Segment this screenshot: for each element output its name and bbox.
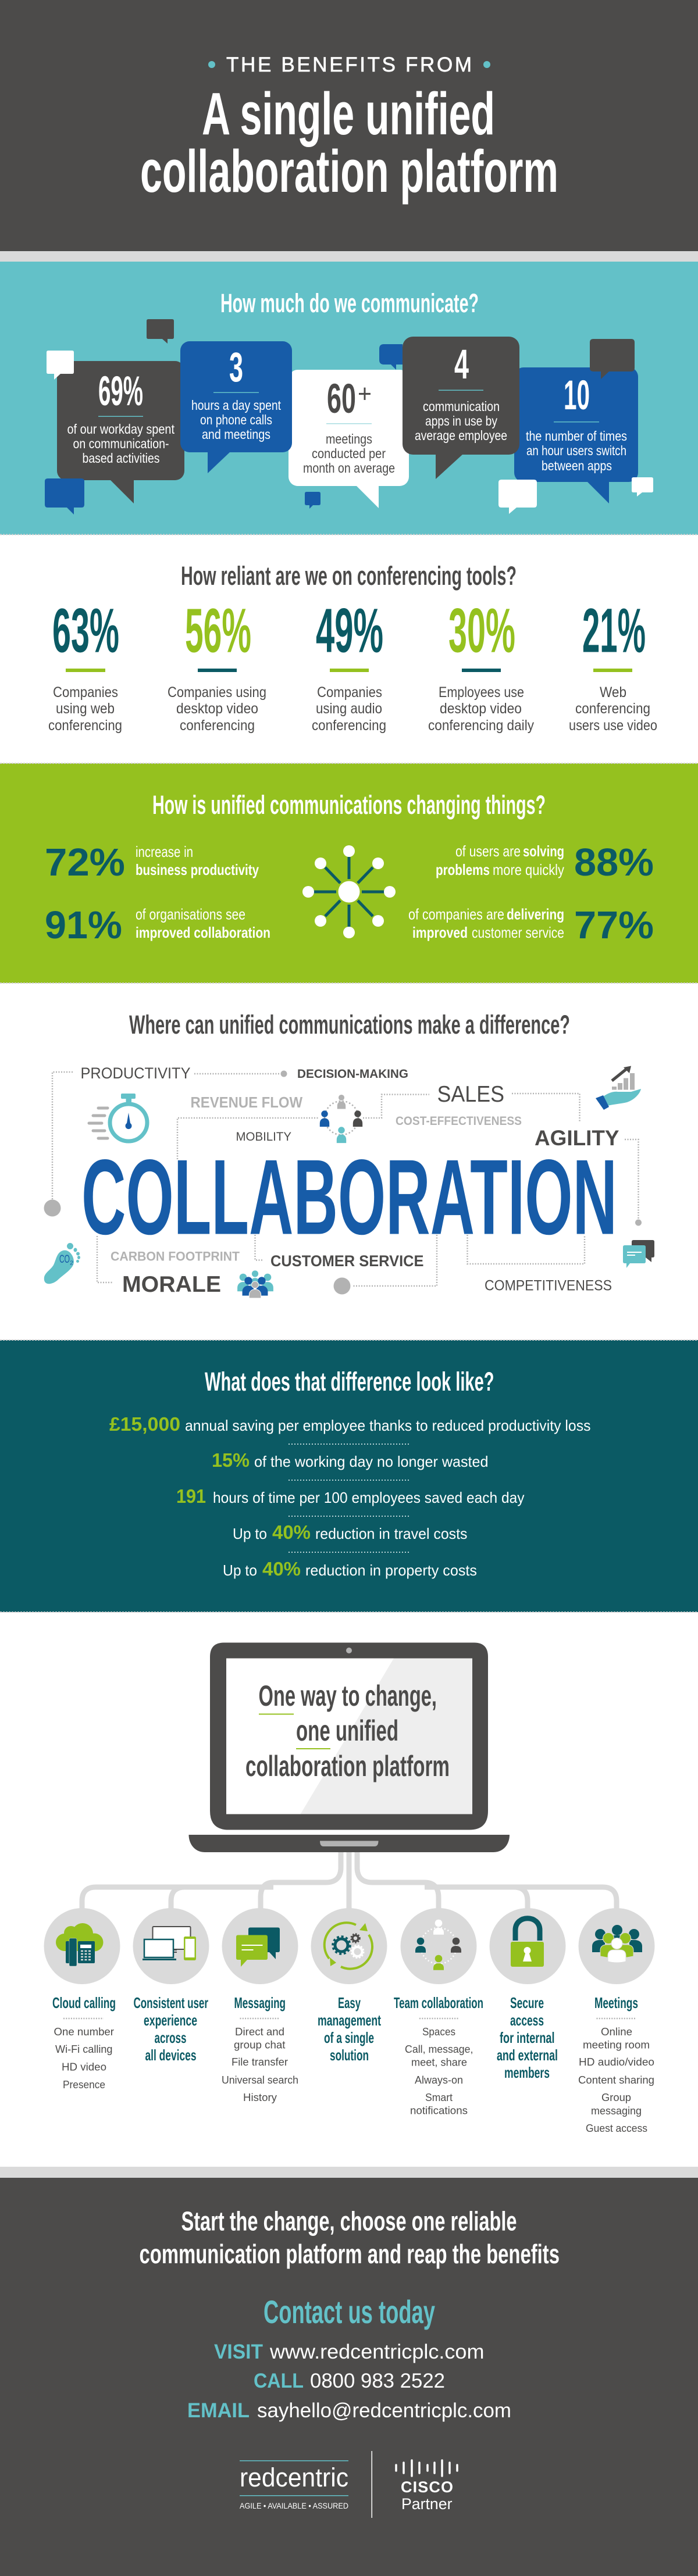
stat: 56%: conferencing bbox=[180, 717, 255, 734]
word: CUSTOMER SERVICE: CUSTOMER SERVICE bbox=[270, 1252, 423, 1270]
feature list bbox=[405, 2025, 473, 2116]
stat line: travel costs bbox=[233, 1521, 468, 1543]
feature list bbox=[54, 2025, 114, 2091]
panel: what does that difference look like bbox=[0, 1340, 698, 1612]
bubble: 10: between apps bbox=[542, 458, 612, 473]
stat line: property costs: 40% bbox=[262, 1558, 301, 1580]
eyebrow heading: THE BENEFITS FROM bbox=[226, 53, 472, 76]
stat: 63%: using web bbox=[56, 701, 115, 717]
stat: 56% bbox=[168, 595, 266, 734]
icon: chat bubbles bbox=[623, 1240, 654, 1268]
panel: where can unified communications make a difference bbox=[0, 983, 698, 1340]
stat: 21%: Web bbox=[600, 684, 626, 701]
stat: 72% bbox=[45, 841, 259, 884]
bubble: 10: 10 bbox=[564, 373, 590, 419]
stat: 72%: increase in bbox=[136, 843, 193, 860]
screen heading bbox=[245, 1680, 450, 1782]
feature: consistent user experience bbox=[133, 1908, 209, 2064]
feature title: management bbox=[318, 2012, 381, 2029]
word: CARBON FOOTPRINT: CARBON FOOTPRINT bbox=[111, 1249, 240, 1264]
bubble: small blue behind 4 bbox=[379, 344, 403, 370]
stat: 72%: business productivity bbox=[136, 861, 259, 878]
bubble: 60+ bbox=[289, 370, 409, 508]
stat: 30%: conferencing daily bbox=[428, 717, 534, 734]
feature list: Universal search bbox=[222, 2074, 298, 2086]
stat: 88%: of users are bbox=[455, 842, 521, 860]
feature list bbox=[222, 2025, 298, 2103]
stat line: travel costs: 40% bbox=[272, 1521, 311, 1543]
logo: cisco partner: Partner bbox=[401, 2495, 453, 2513]
panel: how much do we communicate bbox=[0, 262, 698, 535]
feature list: One number bbox=[54, 2025, 114, 2038]
feature list bbox=[578, 2025, 654, 2134]
icon: group of people bbox=[237, 1270, 273, 1298]
stat line: £15,000: annual saving per employee thanks to reduced productivity loss bbox=[185, 1417, 591, 1434]
stat: 88%: solving bbox=[523, 842, 564, 860]
bubble: 69%: 69% bbox=[98, 369, 143, 415]
feature title bbox=[134, 1994, 208, 2064]
panel: one way to change bbox=[44, 1643, 655, 2134]
feature list: meet, share bbox=[411, 2056, 467, 2068]
closing statement bbox=[140, 2206, 560, 2269]
icon: CO2 footprint: CO bbox=[59, 1253, 70, 1266]
bubble: 69%: based activities bbox=[83, 451, 159, 466]
contact: call: CALL bbox=[254, 2370, 304, 2392]
stat: 77%: 77% bbox=[574, 903, 654, 947]
stat line: £15,000: £15,000 bbox=[109, 1413, 180, 1435]
word: AGILITY: AGILITY bbox=[535, 1126, 619, 1150]
feature title: members bbox=[504, 2064, 550, 2081]
feature list: Wi-Fi calling bbox=[55, 2043, 113, 2055]
closing statement: Start the change, choose one reliable bbox=[181, 2206, 517, 2236]
stat: 49%: Companies bbox=[317, 684, 382, 701]
screen heading: collaboration platform bbox=[245, 1750, 450, 1782]
feature list: Online bbox=[601, 2025, 632, 2038]
stat: 21% bbox=[569, 595, 657, 734]
contact: visit: VISIT bbox=[214, 2341, 263, 2363]
stat: 49%: conferencing bbox=[312, 717, 386, 734]
dotted connector lines bbox=[44, 1071, 642, 1294]
title: A single unified bbox=[202, 80, 495, 147]
feature list: Presence bbox=[63, 2078, 105, 2091]
feature title: Meetings bbox=[594, 1994, 638, 2012]
icon: laptop bbox=[188, 1643, 510, 1852]
icon: CO2 footprint: 2 bbox=[70, 1260, 73, 1266]
panel: call to action footer bbox=[0, 2167, 698, 2576]
word: MOBILITY: MOBILITY bbox=[236, 1130, 291, 1144]
stat line: travel costs: Up to bbox=[233, 1525, 267, 1542]
icon: message bubbles bbox=[236, 1928, 280, 1967]
bubble: 10 bbox=[514, 367, 638, 503]
feature title bbox=[497, 1994, 558, 2081]
icon: hub network bbox=[302, 845, 396, 938]
heading: How reliant are we on conferencing tools? bbox=[181, 561, 517, 591]
heading: What does that difference look like? bbox=[205, 1367, 494, 1396]
stat: 49% bbox=[312, 595, 386, 734]
word: PRODUCTIVITY: PRODUCTIVITY bbox=[80, 1064, 191, 1082]
word: COST-EFFECTIVENESS: COST-EFFECTIVENESS bbox=[396, 1114, 522, 1128]
feature title: all devices bbox=[145, 2046, 197, 2064]
bubble: 60+: 60 bbox=[327, 376, 356, 422]
bubble: 3: 3 bbox=[229, 345, 243, 391]
word: REVENUE FLOW: REVENUE FLOW bbox=[191, 1095, 303, 1111]
screen heading: One way to change, bbox=[258, 1680, 437, 1712]
stat: 56%: desktop video bbox=[176, 701, 258, 717]
bubble: 69%: on communication- bbox=[73, 436, 169, 451]
feature list: Always-on bbox=[415, 2074, 463, 2086]
feature list: Spaces bbox=[422, 2025, 455, 2038]
feature list: notifications bbox=[410, 2105, 468, 2116]
stat: 49%: 49% bbox=[316, 595, 383, 665]
bubble: 69% bbox=[57, 361, 184, 503]
logo: cisco partner bbox=[396, 2460, 457, 2513]
stat line: 191 bbox=[176, 1485, 525, 1507]
feature list: Group bbox=[601, 2091, 631, 2103]
word: MORALE: MORALE bbox=[122, 1272, 221, 1297]
feature: team collaboration bbox=[394, 1908, 483, 2116]
icon: padlock bbox=[511, 1918, 544, 1967]
feature title: Secure bbox=[510, 1994, 544, 2012]
logo: redcentric: AGILE • AVAILABLE • ASSURED bbox=[240, 2501, 348, 2510]
icon: stopwatch bbox=[89, 1094, 147, 1141]
stat: 77%: improved bbox=[412, 924, 468, 941]
feature: meetings bbox=[578, 1908, 655, 2134]
feature list: messaging bbox=[591, 2105, 642, 2117]
panel: how reliant are we on conferencing tools bbox=[0, 535, 698, 763]
stat: 30% bbox=[428, 595, 534, 734]
stat line: travel costs: reduction in travel costs bbox=[315, 1525, 468, 1542]
bubble: 3: hours a day spent bbox=[191, 398, 282, 413]
stat: 63%: 63% bbox=[52, 595, 119, 665]
bubble: 69%: of our workday spent bbox=[67, 421, 175, 437]
screen heading: one unified bbox=[296, 1714, 398, 1747]
contact: visit: www.redcentricplc.com bbox=[269, 2341, 484, 2363]
word: SALES: SALES bbox=[437, 1082, 504, 1107]
contact: email: EMAIL bbox=[187, 2399, 250, 2422]
feature title bbox=[318, 1994, 381, 2064]
stat: 77%: delivering bbox=[507, 906, 564, 923]
feature list: Content sharing bbox=[578, 2074, 654, 2086]
bubble: 60+: meetings bbox=[326, 431, 372, 446]
feature: cloud calling bbox=[44, 1908, 120, 2091]
feature title: for internal bbox=[500, 2029, 555, 2046]
feature title: Team collaboration bbox=[394, 1994, 483, 2012]
stat line: 15% bbox=[212, 1449, 489, 1471]
contact heading: Contact us today bbox=[263, 2293, 435, 2330]
icon: cloud phone bbox=[56, 1923, 104, 1966]
stat: 88% bbox=[436, 841, 654, 884]
bubble: 60+: month on average bbox=[303, 460, 395, 476]
stat: 77%: customer service bbox=[472, 924, 564, 941]
bubble: 3: and meetings bbox=[202, 427, 270, 442]
stat: 56%: Companies using bbox=[168, 684, 266, 701]
bubble: 3: on phone calls bbox=[200, 412, 272, 427]
stat: 91%: of organisations see bbox=[136, 906, 245, 923]
stat: 21%: conferencing bbox=[575, 701, 650, 717]
bubble: 4: 4 bbox=[454, 342, 469, 388]
title bbox=[140, 80, 558, 205]
icon: gears and loop bbox=[325, 1923, 372, 1969]
logo: redcentric: redcentric bbox=[240, 2463, 348, 2492]
feature title: Easy bbox=[338, 1994, 361, 2012]
feature: messaging bbox=[222, 1908, 298, 2103]
stat: 91% bbox=[45, 903, 270, 947]
stat: 91%: 91% bbox=[45, 903, 122, 947]
word: COMPETITIVENESS: COMPETITIVENESS bbox=[485, 1278, 612, 1294]
feature: easy management bbox=[311, 1908, 387, 2064]
stat: 88%: more quickly bbox=[493, 861, 564, 878]
panel: how is unified communications changing things bbox=[0, 763, 698, 983]
panel: header bbox=[0, 0, 698, 262]
stat line: 15%: of the working day no longer wasted bbox=[254, 1453, 489, 1470]
feature list: group chat bbox=[234, 2038, 285, 2051]
stat: 21%: users use video bbox=[569, 717, 657, 734]
feature title: Cloud calling bbox=[52, 1994, 116, 2012]
small speech bubbles bbox=[45, 319, 653, 515]
stat: 91%: improved collaboration bbox=[136, 924, 270, 941]
icon: left title dot bbox=[208, 61, 215, 68]
word: DECISION-MAKING: DECISION-MAKING bbox=[297, 1067, 408, 1081]
feature list: meeting room bbox=[583, 2038, 650, 2051]
feature title: access bbox=[510, 2012, 544, 2029]
connector tubes bbox=[82, 1852, 617, 1913]
bubble: 10: the number of times bbox=[526, 428, 627, 444]
contact: email: sayhello@redcentricplc.com bbox=[257, 2399, 511, 2422]
stat: 30%: Employees use bbox=[439, 684, 524, 701]
stat: 63%: conferencing bbox=[48, 717, 122, 734]
bubble: 60+: conducted per bbox=[312, 446, 386, 461]
feature list: History bbox=[243, 2091, 277, 2103]
stat: 88%: 88% bbox=[574, 841, 654, 884]
feature list: HD audio/video bbox=[579, 2056, 654, 2068]
feature list: Guest access bbox=[586, 2122, 647, 2134]
icon: CO2 footprint bbox=[44, 1243, 80, 1284]
feature list: File transfer bbox=[232, 2056, 288, 2068]
stat line: £15,000 bbox=[109, 1413, 591, 1435]
feature title: across bbox=[155, 2029, 186, 2046]
feature title: Consistent user bbox=[134, 1994, 208, 2012]
icon: devices bbox=[143, 1927, 196, 1960]
feature list: HD video bbox=[62, 2060, 106, 2073]
feature title: and external bbox=[497, 2046, 558, 2064]
feature title: of a single bbox=[324, 2029, 374, 2046]
stat: 56%: 56% bbox=[185, 595, 251, 665]
bubble: 3 bbox=[180, 341, 292, 473]
bubble: 4: average employee bbox=[415, 428, 507, 443]
bubble: 60+: + bbox=[358, 380, 372, 408]
stat line: property costs bbox=[223, 1558, 477, 1580]
feature title: Messaging bbox=[234, 1994, 286, 2012]
feature title: solution bbox=[330, 2046, 369, 2064]
stat line: property costs: Up to bbox=[223, 1562, 257, 1579]
stat: 77%: of companies are bbox=[408, 906, 504, 923]
icon: people ring bbox=[320, 1095, 362, 1143]
heading: How much do we communicate? bbox=[220, 288, 479, 318]
feature title: experience bbox=[144, 2012, 197, 2029]
bubble: 4 bbox=[403, 337, 519, 479]
stat: 63%: Companies bbox=[53, 684, 118, 701]
icon: hand with growth chart bbox=[596, 1066, 641, 1110]
logo: cisco partner: CISCO bbox=[401, 2478, 453, 2496]
stat line: 15%: 15% bbox=[212, 1449, 250, 1471]
stat: 63% bbox=[48, 595, 122, 734]
icon: meeting group bbox=[592, 1925, 642, 1963]
stat line: property costs: reduction in property costs bbox=[305, 1562, 477, 1579]
logo: redcentric bbox=[240, 2460, 348, 2510]
bubble: 4: apps in use by bbox=[425, 413, 497, 428]
stat: 88%: problems bbox=[436, 861, 490, 878]
stat line: 191: 191 bbox=[176, 1485, 206, 1507]
feature list: Direct and bbox=[235, 2025, 284, 2038]
feature list: Smart bbox=[425, 2091, 453, 2103]
stat: 77% bbox=[408, 903, 654, 947]
feature list: Call, message, bbox=[405, 2043, 473, 2055]
stat: 30%: desktop video bbox=[440, 701, 522, 717]
stat line: 191: hours of time per 100 employees saved each day bbox=[213, 1489, 525, 1506]
bubble: 10: an hour users switch bbox=[526, 443, 626, 458]
icon: team ring bbox=[415, 1920, 461, 1970]
icon: right title dot bbox=[483, 61, 490, 68]
contact: call: 0800 983 2522 bbox=[310, 2370, 445, 2392]
stat: 72%: 72% bbox=[45, 841, 125, 884]
stat: 30%: 30% bbox=[448, 595, 515, 665]
feature: secure access bbox=[490, 1908, 565, 2081]
stat: 49%: using audio bbox=[316, 701, 382, 717]
bubble: 4: communication bbox=[423, 399, 500, 414]
